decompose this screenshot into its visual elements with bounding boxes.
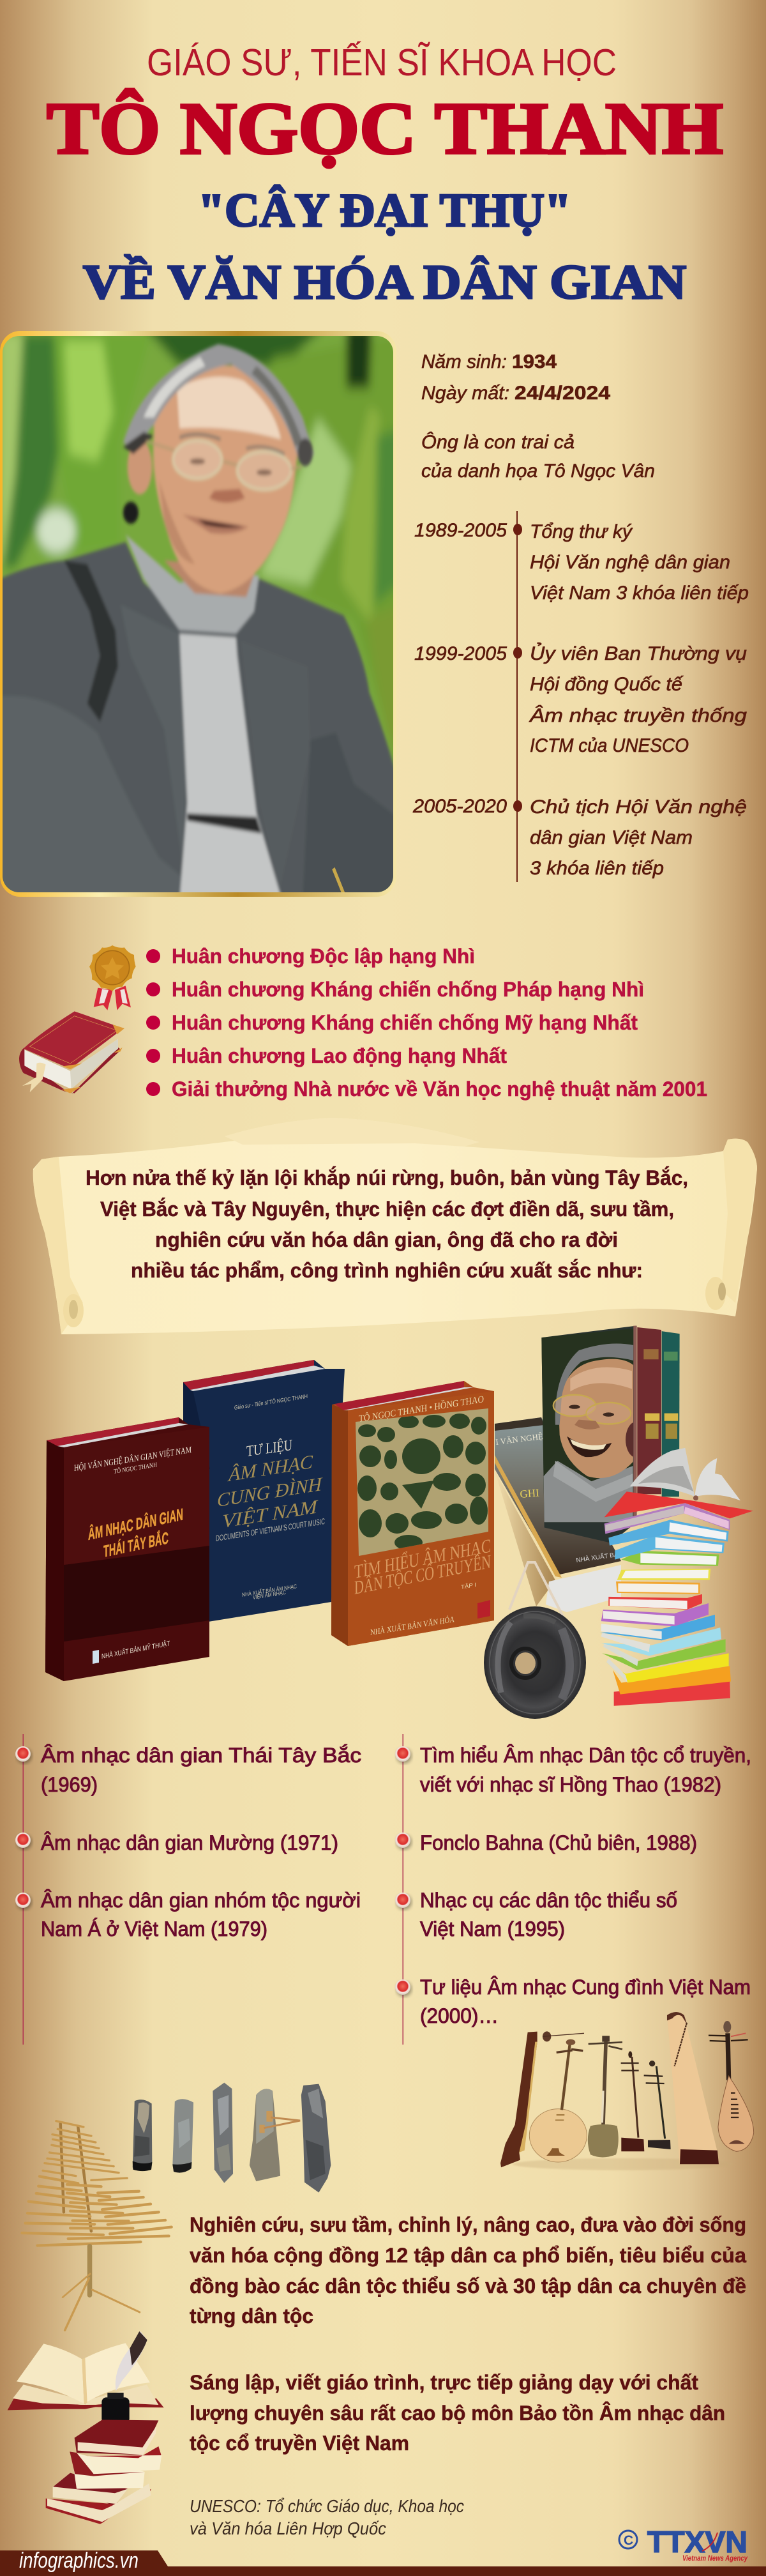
- timeline entry 2005-2020: 2005-2020: [412, 796, 507, 817]
- book: Tìm hiểu Âm nhạc Dân tộc cổ truyền: TÌM HIỂU ÂM NHẠC: [354, 1535, 491, 1583]
- text block: research and collection: đồng bào các dân tộc thiểu số và 30 tập dân ca chuyên đề: [190, 2275, 746, 2298]
- text block: research and collection: từng dân tộc: [190, 2305, 313, 2328]
- scroll text: [86, 1166, 688, 1282]
- award 5: Giải thưởng Nhà nước về Văn học nghệ thuật năm 2001: [172, 1078, 707, 1101]
- family note: [421, 431, 655, 482]
- book: tilted cover behind: [495, 1417, 623, 1612]
- book: Tìm hiểu Âm nhạc Dân tộc cổ truyền: NHÀ XUẤT BẢN VĂN HÓA: [370, 1614, 454, 1637]
- book: Âm nhạc dân gian Thái Tây Bắc: [45, 1417, 209, 1681]
- timeline entry 1999-2005: Hội đồng Quốc tế: [530, 674, 684, 695]
- death date: Ngày mất:: [421, 383, 509, 404]
- timeline entry 1999-2005: Âm nhạc truyền thống: [529, 705, 747, 726]
- title line: Về văn hóa dân gian: VỀ VĂN HÓA DÂN GIAN: [83, 255, 686, 309]
- book: boxed set with portrait: [541, 1326, 680, 1543]
- left work 1: (1969): [41, 1773, 98, 1796]
- right work 1: [420, 1744, 751, 1796]
- right work 3: Việt Nam (1995): [420, 1917, 565, 1940]
- timeline entry 1999-2005: 1999-2005: [414, 643, 507, 664]
- book: Tìm hiểu Âm nhạc Dân tộc cổ truyền: [331, 1381, 494, 1646]
- footer band with site name: [0, 2549, 766, 2576]
- book: Tư liệu Âm nhạc Cung đình Việt Nam: NHÀ XUẤT BẢN ÂM NHẠC: [242, 1582, 297, 1598]
- scroll text: nhiều tác phẩm, công trình nghiên cứu xuất sắc như:: [131, 1259, 643, 1282]
- left work 3: Nam Á ở Việt Nam (1979): [41, 1917, 267, 1940]
- unesco note: UNESCO: Tổ chức Giáo dục, Khoa học: [190, 2496, 464, 2516]
- book: Tư liệu Âm nhạc Cung đình Việt Nam: ÂM NHẠC: [227, 1451, 313, 1486]
- icon: rainbow book stack: [600, 1448, 753, 1706]
- text block: research and collection: Nghiên cứu, sưu tầm, chỉnh lý, nâng cao, đưa vào đời sống: [190, 2213, 746, 2236]
- icon: medal: [89, 945, 136, 1010]
- works list: left column: [15, 1734, 361, 2045]
- book: Tư liệu Âm nhạc Cung đình Việt Nam: DOCUMENTS OF VIETNAM'S COURT MUSIC: [216, 1516, 325, 1543]
- timeline entry 1999-2005: ICTM của UNESCO: [530, 735, 689, 756]
- title line: Tô Ngọc Thanh: TÔ NGỌC THANH: [47, 88, 723, 170]
- personal facts: [421, 351, 655, 482]
- award 1: Huân chương Độc lập hạng Nhì: [172, 945, 475, 968]
- works list: right column: [395, 1734, 751, 2045]
- right work 1: Tìm hiểu Âm nhạc Dân tộc cổ truyền,: [420, 1744, 751, 1767]
- icon: red book: [19, 1011, 124, 1094]
- left work 1: [41, 1744, 361, 1796]
- right work 3: Nhạc cụ các dân tộc thiểu số: [420, 1889, 677, 1912]
- scroll text: Việt Bắc và Tây Nguyên, thực hiện các đợt điền dã, sưu tầm,: [100, 1198, 674, 1221]
- timeline entry 2005-2020: 3 khóa liên tiếp: [530, 858, 664, 879]
- icon: traditional string instruments: [500, 2012, 754, 2170]
- timeline entry 1989-2005: Việt Nam 3 khóa liên tiếp: [530, 583, 749, 604]
- timeline entry 2005-2020: dân gian Việt Nam: [530, 827, 693, 848]
- award 3: Huân chương Kháng chiến chống Mỹ hạng Nhất: [172, 1011, 638, 1034]
- TTXVN logo: C: [624, 2533, 633, 2548]
- timeline entry 2005-2020: [412, 796, 747, 879]
- title line: Giáo sư, Tiến sĩ Khoa học: GIÁO SƯ, TIẾN SĨ KHOA HỌC: [147, 42, 617, 84]
- text block: research and collection: [190, 2213, 746, 2328]
- book: Âm nhạc dân gian Thái Tây Bắc: NHÀ XUẤT BẢN MỸ THUẬT: [101, 1639, 170, 1661]
- right work 2: Fonclo Bahna (Chủ biên, 1988): [420, 1831, 697, 1854]
- portrait photo with gold frame: [0, 331, 396, 897]
- awards list: [146, 945, 707, 1101]
- scroll text: Hơn nửa thế kỷ lặn lội khắp núi rừng, buôn, bản vùng Tây Bắc,: [86, 1166, 688, 1189]
- book: Tư liệu Âm nhạc Cung đình Việt Nam: Giáo sư - Tiến sĩ TÔ NGỌC THANH: [234, 1393, 308, 1411]
- footer band with site name: infographics.vn: [19, 2549, 139, 2573]
- left work 3: [41, 1889, 361, 1940]
- right work 4: (2000)…: [420, 2004, 499, 2027]
- timeline entry 1989-2005: [414, 520, 749, 604]
- parchment scroll: [33, 1118, 757, 1334]
- timeline entry 1989-2005: Hội Văn nghệ dân gian: [530, 552, 730, 573]
- award 4: Huân chương Lao động hạng Nhất: [172, 1044, 507, 1067]
- family note: Ông là con trai cả: [421, 431, 574, 453]
- left work 1: Âm nhạc dân gian Thái Tây Bắc: [41, 1744, 361, 1767]
- timeline entry 2005-2020: Chủ tịch Hội Văn nghệ: [530, 796, 747, 818]
- text block: founding and teaching: lượng chuyên sâu rất cao bộ môn Bảo tồn Âm nhạc dân: [190, 2402, 725, 2425]
- icon: stone lithophone: [133, 2083, 331, 2193]
- career timeline: [412, 511, 749, 882]
- book: Âm nhạc dân gian Thái Tây Bắc: HỘI VĂN NGHỆ DÂN GIAN VIỆT NAM: [74, 1444, 192, 1474]
- timeline entry 1999-2005: Ủy viên Ban Thường vụ: [530, 642, 747, 664]
- book: Âm nhạc dân gian Thái Tây Bắc: ÂM NHẠC DÂN GIAN: [88, 1505, 183, 1544]
- icon: stack of red books: [46, 2420, 161, 2524]
- unesco note: [190, 2496, 464, 2538]
- TTXVN logo: [619, 2525, 748, 2563]
- right work 3: [420, 1889, 677, 1940]
- icon: gong: [484, 1562, 586, 1719]
- book: Tư liệu Âm nhạc Cung đình Việt Nam: TƯ LIỆU: [246, 1437, 292, 1460]
- title block: [47, 42, 723, 309]
- death date: 24/4/2024: [514, 383, 610, 404]
- text block: research and collection: văn hóa cộng đồng 12 tập dân ca phổ biến, tiêu biểu của: [190, 2244, 746, 2267]
- award 2: Huân chương Kháng chiến chống Pháp hạng Nhì: [172, 978, 644, 1001]
- right work 4: Tư liệu Âm nhạc Cung đình Việt Nam: [420, 1976, 751, 1999]
- timeline entry 1999-2005: [414, 642, 747, 756]
- text block: founding and teaching: [190, 2371, 725, 2455]
- left work 3: Âm nhạc dân gian nhóm tộc người: [41, 1889, 361, 1912]
- right work 4: [420, 1976, 751, 2027]
- text block: founding and teaching: Sáng lập, viết giáo trình, trực tiếp giảng dạy với chất: [190, 2371, 698, 2394]
- unesco note: và Văn hóa Liên Hợp Quốc: [190, 2519, 386, 2538]
- left work 2: Âm nhạc dân gian Mường (1971): [41, 1831, 338, 1854]
- birth year: 1934: [512, 351, 557, 372]
- book: Tư liệu Âm nhạc Cung đình Việt Nam: [183, 1360, 345, 1622]
- right work 1: viết với nhạc sĩ Hồng Thao (1982): [420, 1773, 721, 1796]
- title line: Cây đại thụ: "CÂY ĐẠI THỤ": [198, 185, 571, 237]
- book: Tìm hiểu Âm nhạc Dân tộc cổ truyền: DÂN TỘC CỔ TRUYỀN: [354, 1551, 491, 1599]
- book: Tư liệu Âm nhạc Cung đình Việt Nam: VIỆN ÂM NHẠC: [253, 1589, 286, 1601]
- family note: của danh họa Tô Ngọc Vân: [421, 461, 655, 482]
- TTXVN logo: TTXVN: [647, 2525, 747, 2559]
- book: Âm nhạc dân gian Thái Tây Bắc: TÔ NGỌC THANH: [114, 1461, 157, 1475]
- icon: open book, quill and ink: [8, 2331, 164, 2423]
- scroll text: nghiên cứu văn hóa dân gian, ông đã cho ra đời: [155, 1228, 618, 1251]
- book: tilted cover behind: GHI: [520, 1486, 540, 1500]
- birth year: Năm sinh:: [421, 351, 507, 372]
- book: Âm nhạc dân gian Thái Tây Bắc: THÁI TÂY BẮC: [103, 1528, 169, 1561]
- book: Tư liệu Âm nhạc Cung đình Việt Nam: VIỆT NAM: [222, 1495, 319, 1532]
- text block: founding and teaching: tộc cổ truyền Việt Nam: [190, 2432, 409, 2455]
- timeline entry 1989-2005: Tổng thư ký: [530, 521, 633, 542]
- icon: t'rung bamboo xylophone: [22, 2121, 172, 2330]
- book: Tư liệu Âm nhạc Cung đình Việt Nam: CUNG ĐÌNH: [217, 1473, 323, 1511]
- timeline entry 1989-2005: 1989-2005: [414, 520, 507, 541]
- book: Tìm hiểu Âm nhạc Dân tộc cổ truyền: TẬP I: [461, 1581, 476, 1590]
- book: tilted cover behind: I VĂN NGHỆ DÂ: [495, 1429, 558, 1447]
- TTXVN logo: Vietnam News Agency: [682, 2554, 748, 2563]
- book: tilted cover behind: NHÀ XUẤT BẢN: [576, 1550, 623, 1564]
- book: Tìm hiểu Âm nhạc Dân tộc cổ truyền: TÔ NGỌC THANH • HỒNG THAO: [359, 1393, 484, 1424]
